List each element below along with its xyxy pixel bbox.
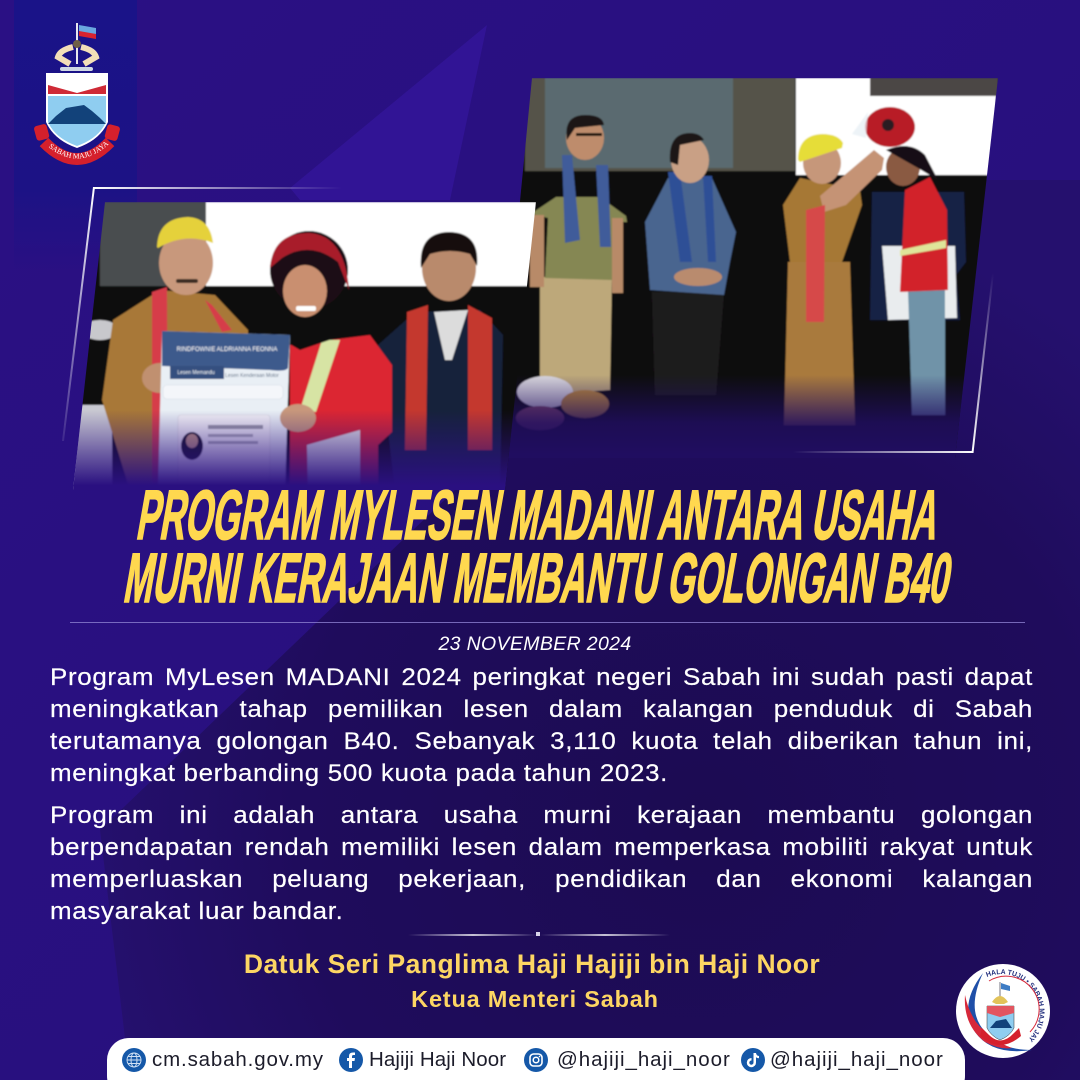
icon: website globe [122, 1048, 146, 1072]
licence card on phone screen [158, 331, 316, 490]
text block: first paragraph: Program MyLesen MADANI 2024 peringkat negeri Sabah ini sudah pasti dapat [50, 664, 1033, 691]
icon: facebook [339, 1048, 363, 1072]
text block: second paragraph: berpendapatan rendah memiliki lesen dalam memperkasa mobiliti rakyat untuk [50, 834, 1033, 861]
person: woman in red shirt and helmet [270, 231, 392, 490]
facebook name: Hajiji Haji Noor [369, 1048, 506, 1071]
frame: left photo corner [62, 187, 342, 441]
icon: tiktok [741, 1048, 765, 1072]
photo: Chief Minister and licence recipient [60, 202, 540, 495]
text block: second paragraph: Program ini adalah antara usaha murni kerajaan membantu golongan [50, 802, 1033, 829]
emblem: Sabah coat of arms: SABAH MAJU JAYA [48, 142, 109, 158]
tiktok handle: @hajiji_haji_noor [770, 1048, 944, 1071]
icon: instagram [524, 1048, 548, 1072]
text block: second paragraph [50, 802, 1033, 925]
text block: second paragraph: masyarakat luar bandar. [50, 898, 343, 925]
person: Chief Minister in brown uniform [783, 134, 884, 425]
attribution name: Datuk Seri Panglima Haji Hajiji bin Haji Noor [244, 949, 820, 979]
licence card on phone screen: Lesen Kenderaan Motor [225, 373, 279, 379]
person: man in blue shirt [645, 133, 736, 395]
website link: cm.sabah.gov.my [152, 1048, 324, 1071]
person: man in brown uniform [102, 217, 248, 490]
title [119, 475, 958, 617]
divider ornament [408, 932, 670, 936]
text block: second paragraph: memperluaskan peluang pekerjaan, pendidikan dan ekonomi kalangan [50, 866, 1033, 893]
photo: Chief Minister fitting helmet on stage [480, 78, 1010, 463]
frame: right photo corner [793, 273, 994, 453]
text block: first paragraph: terutamanya golongan B40. Sebanyak 3,110 kuota telah diberikan tahun ini, [50, 728, 1033, 755]
text block: first paragraph [50, 664, 1033, 787]
text block: first paragraph: meningkatkan tahap pemilikan lesen dalam kalangan penduduk di Sabah [50, 696, 1033, 723]
person: man in navy shirt with scarf [378, 232, 503, 490]
attribution role: Ketua Menteri Sabah [411, 986, 659, 1012]
licence card on phone screen: RINDFOWNIE ALDRIANNA FEONNA [177, 347, 277, 353]
date: 23 NOVEMBER 2024 [438, 633, 632, 655]
flowers [516, 376, 609, 430]
social media bar [107, 1038, 965, 1080]
licence card on phone screen: Lesen Memandu [177, 370, 215, 376]
instagram handle: @hajiji_haji_noor [557, 1048, 731, 1071]
badge: Hala Tuju Sabah Maju Jaya: HALA TUJU • SABAH MAJU JAYA [986, 969, 1045, 1042]
emblem: Sabah coat of arms [34, 23, 120, 165]
person: man in olive shirt [530, 115, 627, 395]
text block: first paragraph: meningkat berbanding 500 kuota pada tahun 2023. [50, 760, 668, 787]
person: recipient in red shirt with helmet [852, 107, 966, 415]
